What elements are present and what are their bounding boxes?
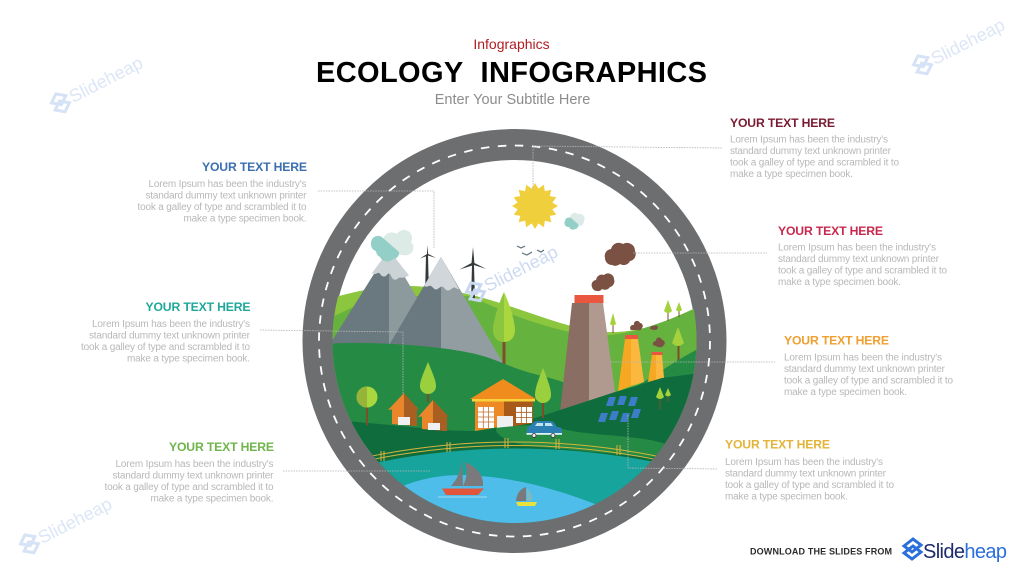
text: crimson, right: [778, 224, 947, 288]
text: green, lower left: took a galley of type and scrambled it to: [104, 482, 274, 493]
icon: sun: [512, 183, 558, 229]
text: teal, left: [81, 300, 251, 364]
small orange chimney: [648, 352, 664, 382]
blue water: [404, 475, 595, 523]
text: dark red, top right: [730, 116, 899, 180]
small sailboat: [516, 487, 537, 506]
text: green, lower left: [104, 440, 274, 504]
watermark: top left: Slideheap: [66, 53, 146, 107]
cone tree: [420, 362, 436, 402]
text: dark red, top right: standard dummy text unknown printer: [730, 146, 892, 157]
teal lake: [378, 448, 651, 523]
large sailboat: [438, 457, 487, 498]
right mountain: [390, 257, 502, 363]
text: yellow, lower right: took a galley of type and scrambled it to: [725, 480, 894, 491]
back hill: [332, 286, 696, 462]
text: yellow, lower right: [725, 438, 894, 502]
orange chimney: [618, 335, 644, 391]
text: blue, upper left: Lorem Ipsum has been the industry's: [148, 179, 306, 190]
subtitle: Enter Your Subtitle Here: [435, 92, 590, 108]
footer: Slideheap logo: Slideheap: [923, 541, 1007, 563]
text: blue, upper left: took a galley of type and scrambled it to: [138, 202, 307, 213]
text: teal, left: YOUR TEXT HERE: [146, 300, 250, 314]
text: blue, upper left: standard dummy text unknown printer: [146, 190, 307, 202]
text: orange, right: YOUR TEXT HERE: [784, 334, 889, 348]
footer: download label: DOWNLOAD THE SLIDES FROM: [750, 546, 892, 556]
cone tree by house: [535, 368, 551, 418]
lower road band: [496, 425, 666, 458]
eyebrow: Infographics: [473, 36, 550, 52]
car: [526, 421, 562, 438]
large house: [470, 379, 536, 431]
text: orange, right: standard dummy text unknown printer: [784, 364, 946, 375]
left mountain: [332, 258, 417, 352]
watermark: bottom left: Slideheap: [35, 494, 115, 548]
fence: [372, 438, 656, 461]
text: blue, upper left: YOUR TEXT HERE: [202, 160, 307, 174]
text: yellow, lower right: Lorem Ipsum has been the industry's: [725, 457, 883, 468]
text: dark red, top right: make a type specimen book.: [730, 169, 853, 180]
leader lines: [260, 146, 775, 471]
solar panels: [598, 396, 641, 422]
text: crimson, right: Lorem Ipsum has been the industry's: [778, 242, 936, 254]
text: orange, right: make a type specimen book.: [784, 387, 907, 398]
text: yellow, lower right: make a type specimen book.: [725, 492, 848, 502]
watermark: top right: Slideheap: [928, 15, 1008, 69]
small hill trees: [610, 300, 684, 361]
middle hill: [332, 296, 696, 407]
smoke: top cloud: [605, 243, 636, 266]
text: teal, left: took a galley of type and scrambled it to: [81, 342, 250, 353]
text: blue, upper left: [138, 160, 307, 224]
text: crimson, right: standard dummy text unknown printer: [778, 254, 940, 265]
text: yellow, lower right: standard dummy text unknown printer: [725, 468, 887, 480]
text: teal, left: make a type specimen book.: [127, 354, 250, 364]
text: green, lower left: YOUR TEXT HERE: [169, 440, 274, 454]
icon: small cloud: [564, 213, 585, 230]
text: yellow, lower right: YOUR TEXT HERE: [725, 438, 830, 452]
title: ECOLOGY INFOGRAPHICS: [316, 57, 707, 89]
text: green, lower left: make a type specimen book.: [150, 494, 274, 504]
big chimney: [560, 295, 615, 412]
text: dark red, top right: Lorem Ipsum has been the industry's: [730, 134, 888, 146]
text: blue, upper left: make a type specimen book.: [184, 214, 306, 224]
smoke: small clouds: [630, 321, 665, 347]
smoke: lower cloud: [592, 273, 614, 291]
watermark: center: Slideheap: [481, 242, 561, 296]
dark green valley: [325, 343, 700, 480]
dark foreground hill: [325, 373, 700, 480]
text: orange, right: [784, 334, 953, 398]
icon: volcano cloud: [371, 230, 414, 261]
text: crimson, right: make a type specimen book.: [778, 277, 901, 288]
text: teal, left: standard dummy text unknown printer: [89, 330, 251, 342]
text: dark red, top right: YOUR TEXT HERE: [730, 116, 835, 130]
text: orange, right: Lorem Ipsum has been the industry's: [784, 352, 942, 364]
icon: wind turbines: [420, 245, 486, 301]
text: crimson, right: YOUR TEXT HERE: [778, 224, 883, 238]
road ring: [318, 144, 711, 538]
round tree: [356, 386, 378, 425]
text: green, lower left: standard dummy text unknown printer: [112, 470, 274, 482]
text: green, lower left: Lorem Ipsum has been the industry's: [116, 459, 274, 470]
hillside trees: [656, 387, 671, 410]
small house 1: [388, 393, 419, 426]
ecology scene: [325, 183, 700, 540]
icon: birds: [517, 246, 544, 255]
title block: [316, 36, 707, 108]
small house 2: [418, 400, 449, 431]
text: orange, right: took a galley of type and scrambled it to: [784, 376, 953, 386]
text: dark red, top right: took a galley of type and scrambled it to: [730, 158, 899, 168]
text: teal, left: Lorem Ipsum has been the industry's: [92, 319, 250, 330]
tall tree: [493, 292, 515, 367]
text: crimson, right: took a galley of type and scrambled it to: [778, 266, 947, 276]
